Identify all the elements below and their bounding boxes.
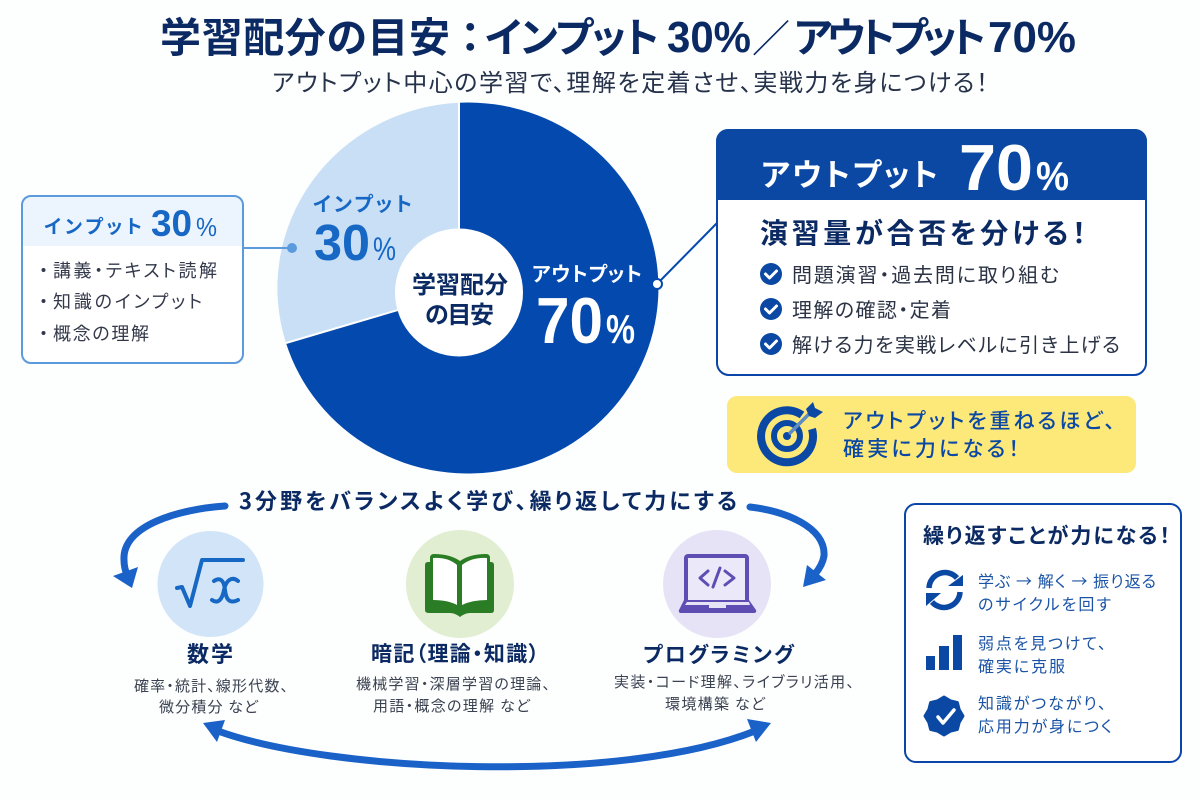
field description: math: 確率・統計、線形代数、: [134, 675, 288, 696]
heading: three fields: 3分野をバランスよく学び、繰り返して力にする: [239, 484, 737, 516]
title: ／: [752, 8, 790, 63]
arrow: bottom double: [203, 719, 771, 767]
field: programming: [614, 530, 854, 714]
field description: memorization: 用語・概念の理解 など: [373, 695, 531, 716]
input label: [313, 188, 412, 271]
title: 学習配分の目安: [160, 4, 450, 64]
input label: 30: [314, 214, 370, 271]
input panel list: 知識のインプット: [53, 288, 202, 314]
icon: open book: [406, 530, 514, 638]
callout text: アウトプットを重ねるほど、: [843, 405, 1115, 435]
field description: math: [134, 675, 288, 717]
field: memorization: [356, 530, 550, 716]
panel: input: [22, 196, 243, 363]
center label: [412, 265, 508, 330]
field name: programming: プログラミング: [643, 639, 795, 669]
field description: programming: [614, 671, 854, 714]
arrow: top left: [113, 506, 225, 588]
output label: [532, 258, 642, 357]
repetition text 2: [978, 630, 1106, 677]
input label: %: [373, 231, 396, 267]
output panel heading: %: [1036, 153, 1069, 199]
output label: %: [606, 306, 635, 352]
field name: memorization: 暗記（理論・知識）: [371, 638, 539, 668]
icon: target: [761, 402, 823, 462]
subtitle: アウトプット中心の学習で、理解を定着させ、実戦力を身につける！: [272, 63, 988, 98]
slice dividers: [286, 102, 459, 343]
connector: output: [652, 223, 717, 289]
output panel heading: 70: [959, 131, 1033, 204]
field description: memorization: [356, 673, 550, 716]
title: [160, 4, 1076, 64]
output panel subheading: 演習量が合否を分ける！: [760, 212, 1086, 252]
input panel heading: 30: [151, 203, 192, 244]
center label: の目安: [425, 295, 494, 330]
repetition text 2: 確実に克服: [978, 653, 1065, 677]
input panel heading: [44, 203, 217, 244]
callout: yellow: [727, 396, 1136, 473]
icon: square root x: [158, 531, 264, 637]
repetition text 1: 学ぶ → 解く → 振り返る: [978, 568, 1156, 592]
repetition text 3: 知識がつながり、: [978, 690, 1106, 714]
pie slice: output 70%: [286, 102, 658, 473]
title: アウトプット: [794, 4, 986, 64]
repetition text 1: のサイクルを回す: [978, 591, 1111, 615]
check item 1: 問題演習・過去問に取り組む: [792, 259, 1059, 288]
output panel header: [716, 129, 1147, 200]
icon: bar chart: [926, 635, 962, 670]
field description: memorization: 機械学習・深層学習の理論、: [356, 673, 550, 694]
repetition text 1: [978, 568, 1156, 615]
title: ：: [460, 4, 480, 64]
panel: output: [716, 129, 1147, 375]
title: 70%: [988, 13, 1076, 62]
input label: インプット: [313, 188, 412, 217]
input panel list: 講義・テキスト読解: [53, 257, 217, 283]
icon: check badge: [925, 697, 963, 735]
field description: programming: 実装・コード理解、ライブラリ活用、: [614, 671, 854, 692]
connector: input: [243, 243, 297, 253]
output panel heading: [761, 131, 1069, 204]
panel: repetition: [905, 504, 1181, 762]
pie chart: [277, 102, 658, 473]
center label: 学習配分: [412, 265, 508, 300]
input panel heading: インプット: [44, 212, 142, 239]
input panel list: [42, 257, 217, 346]
repetition text 2: 弱点を見つけて、: [978, 630, 1106, 654]
icon: cycle: [926, 573, 963, 607]
title: インプット: [485, 4, 659, 64]
output label: アウトプット: [532, 258, 642, 287]
callout text: 確実に力になる！: [843, 433, 1019, 463]
field description: math: 微分積分 など: [159, 696, 259, 717]
output label: 70: [536, 284, 603, 357]
repetition text 3: 応用力が身につく: [978, 713, 1112, 737]
input panel heading: %: [196, 212, 217, 242]
check item 3: 解ける力を実戦レベルに引き上げる: [792, 329, 1120, 358]
input panel list: 概念の理解: [53, 320, 149, 346]
center hole: [395, 228, 523, 356]
output panel heading: アウトプット: [761, 150, 938, 195]
field name: math: 数学: [187, 637, 233, 669]
arrow: top right: [750, 507, 826, 587]
check item 2: 理解の確認・定着: [792, 294, 951, 323]
field description: programming: 環境構築 など: [665, 693, 766, 714]
repetition panel heading: 繰り返すことが力になる！: [923, 520, 1170, 550]
callout text: [843, 405, 1115, 463]
title: 30%: [667, 13, 751, 62]
field: math: [134, 531, 288, 717]
icon: laptop code: [663, 530, 771, 638]
repetition text 3: [978, 690, 1112, 737]
pie slice: input 30%: [277, 103, 459, 343]
